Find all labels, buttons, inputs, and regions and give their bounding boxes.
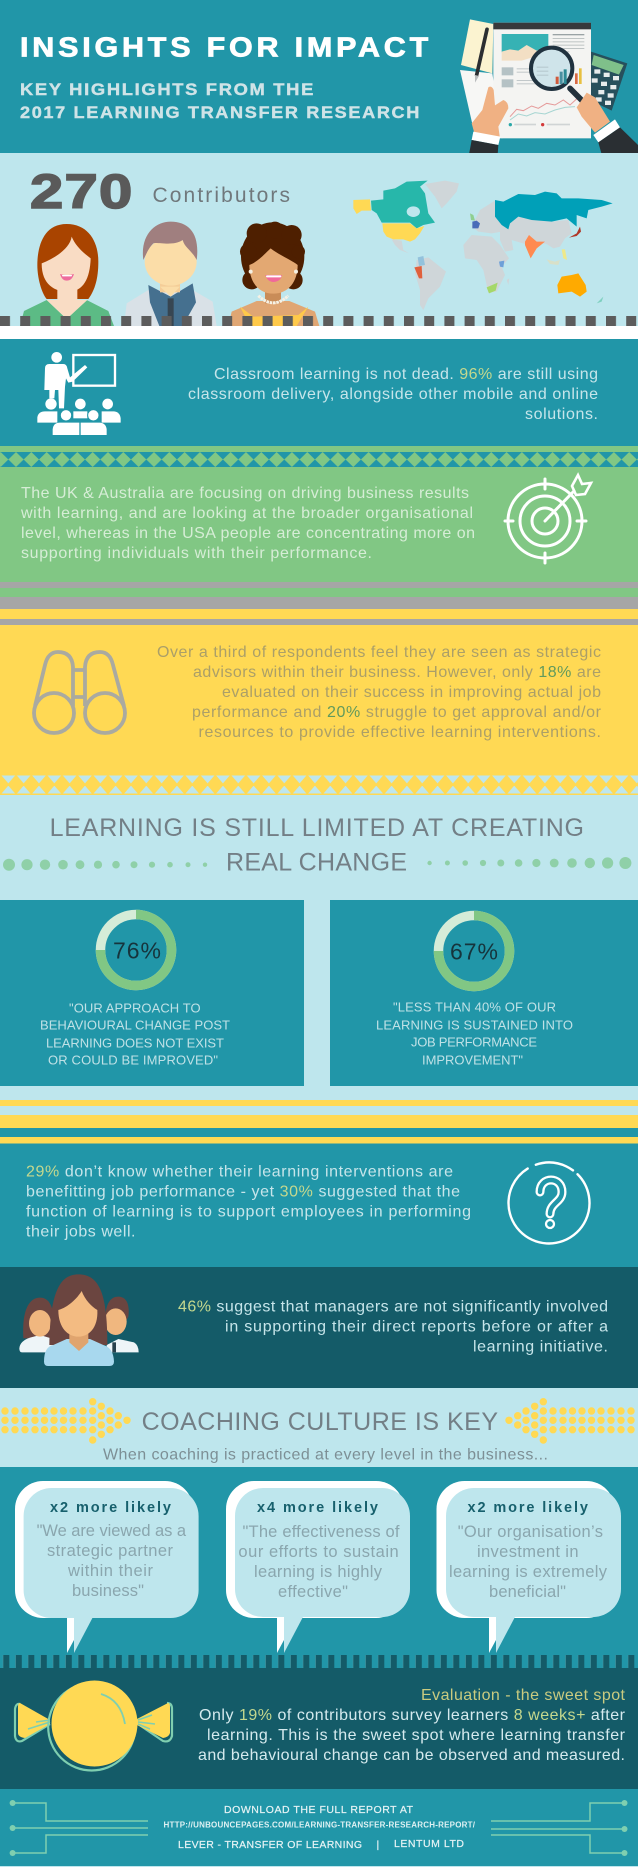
quote: "Our organisation’s xyxy=(458,1523,603,1541)
text: strategic advisors: advisors within their business. However, only 18% are xyxy=(193,664,601,681)
stat: 270: 270 xyxy=(30,166,134,219)
quote: learning is highly xyxy=(254,1563,383,1581)
subtitle: KEY HIGHLIGHTS FROM THE xyxy=(20,81,315,99)
subtitle xyxy=(20,81,421,122)
text: UK and Australia: The UK & Australia are focusing on driving business results xyxy=(21,485,469,502)
bubble: strategic partner xyxy=(15,1481,199,1653)
text: strategic advisors: performance and 20% struggle to get approval and/or xyxy=(192,704,602,721)
panel: classroom xyxy=(0,339,638,446)
panel: learning is limited xyxy=(0,795,638,1100)
label: contributors: Contributors xyxy=(152,184,290,207)
icon: woman with red hair xyxy=(20,224,114,326)
quote: learning is extremely xyxy=(449,1563,608,1581)
quote xyxy=(37,1522,187,1600)
quote: our efforts to sustain xyxy=(238,1543,399,1561)
icon: question mark xyxy=(495,1149,603,1257)
panel: business results xyxy=(0,446,638,582)
icon: man in jacket xyxy=(124,222,217,326)
subtitle: 2017 LEARNING TRANSFER RESEARCH xyxy=(20,104,421,122)
credits xyxy=(178,1838,464,1851)
text: classroom learning: solutions. xyxy=(525,406,598,423)
icon: woman with curly hair xyxy=(228,222,319,326)
bubble: investment xyxy=(436,1481,621,1653)
world map xyxy=(353,181,613,310)
text: managers: in supporting their direct reports before or after a xyxy=(225,1319,608,1336)
icon: target with arrow xyxy=(505,475,591,563)
card: 67% xyxy=(330,900,638,1086)
panel: evaluation sweet spot xyxy=(0,1668,638,1789)
quote xyxy=(449,1523,608,1601)
card: 76% xyxy=(0,900,304,1086)
bubble: sustain learning xyxy=(226,1481,410,1653)
quote: sustained learning: LEARNING IS SUSTAINED INTO xyxy=(376,1017,573,1032)
text: UK and Australia xyxy=(20,485,475,562)
quote: "The effectiveness of xyxy=(242,1523,400,1541)
icon: binoculars xyxy=(34,652,125,733)
text: job performance: benefitting job performance - yet 30% suggested that the xyxy=(26,1184,460,1201)
panel: managers xyxy=(0,1267,638,1388)
text: managers: 46% suggest that managers are not significantly involved xyxy=(178,1299,608,1316)
donut chart: 67% xyxy=(438,916,510,986)
text: job performance: function of learning is to support employees in performing xyxy=(26,1204,471,1220)
dotted ornaments xyxy=(3,857,631,871)
text: strategic advisors: evaluated on their success in improving actual job xyxy=(222,684,601,701)
text: evaluation: learning. This is the sweet spot where learning transfer xyxy=(207,1727,626,1744)
panel: footer xyxy=(0,1789,638,1867)
credits: LENTUM LTD xyxy=(394,1838,464,1850)
quote: sustained learning: "LESS THAN 40% OF OUR xyxy=(393,1000,556,1015)
download heading: DOWNLOAD THE FULL REPORT AT xyxy=(224,1804,414,1816)
donut chart: 76% xyxy=(100,914,172,986)
text: job performance xyxy=(26,1164,471,1240)
text: UK and Australia: supporting individuals with their performance. xyxy=(21,545,372,562)
likelihood: x4 more likely xyxy=(257,1500,378,1516)
value: 76%: 76% xyxy=(113,938,161,964)
text: job performance: their jobs well. xyxy=(26,1224,136,1240)
panel: coaching culture xyxy=(0,1388,638,1467)
quote: business" xyxy=(72,1582,144,1600)
quote: behavioural change: "OUR APPROACH TO xyxy=(69,1000,201,1015)
quote: behavioural change xyxy=(40,1000,230,1068)
quote: sustained learning xyxy=(376,1000,573,1067)
quote: investment in xyxy=(477,1543,578,1561)
heading: REAL CHANGE xyxy=(226,849,407,877)
quote xyxy=(238,1523,400,1601)
text: job performance: 29% don’t know whether their learning interventions are xyxy=(26,1164,453,1181)
text: evaluation: Only 19% of contributors survey learners 8 weeks+ after xyxy=(199,1707,626,1724)
text: strategic advisors xyxy=(157,644,602,741)
subheading: When coaching is practiced at every level in the business... xyxy=(103,1446,548,1463)
quote: within their xyxy=(67,1562,154,1580)
credits: | xyxy=(376,1839,379,1851)
quote: strategic partner xyxy=(47,1542,174,1560)
text: UK and Australia: with learning, and are looking at the broader organisational xyxy=(20,505,473,522)
left dotted arrow xyxy=(1,1398,131,1444)
panel: header xyxy=(0,0,638,154)
icon: report under magnifying glass xyxy=(460,19,638,154)
panel: speech bubbles xyxy=(0,1467,638,1655)
quote: behavioural change: OR COULD BE IMPROVED" xyxy=(48,1053,218,1068)
text: evaluation xyxy=(198,1687,626,1764)
right dotted arrow xyxy=(505,1398,635,1444)
circuit decoration right xyxy=(491,1800,628,1856)
heading: COACHING CULTURE IS KEY xyxy=(142,1408,498,1436)
panel: job performance xyxy=(0,1144,638,1267)
text: classroom learning: Classroom learning is not dead. 96% are still using xyxy=(214,366,598,383)
quote: beneficial" xyxy=(489,1583,566,1601)
text: strategic advisors: Over a third of respondents feel they are seen as strategic xyxy=(157,644,601,661)
text: classroom learning xyxy=(188,366,598,423)
text: evaluation: Evaluation - the sweet spot xyxy=(421,1687,626,1704)
likelihood: x2 more likely xyxy=(468,1500,588,1516)
icon: team of three people xyxy=(19,1274,139,1366)
text: managers xyxy=(178,1299,608,1356)
quote: sustained learning: IMPROVEMENT" xyxy=(422,1052,523,1067)
panel: strategic advisors xyxy=(0,625,638,795)
report url: HTTP://UNBOUNCEPAGES.COM/LEARNING-TRANSFER-RESEARCH-REPORT/ xyxy=(164,1821,476,1830)
quote: effective" xyxy=(278,1583,348,1601)
title: INSIGHTS FOR IMPACT xyxy=(20,32,432,63)
value: 67%: 67% xyxy=(450,939,498,965)
likelihood: x2 more likely xyxy=(50,1500,171,1516)
text: strategic advisors: resources to provide effective learning interventions. xyxy=(198,724,601,741)
heading: LEARNING IS STILL LIMITED AT CREATING xyxy=(50,814,584,842)
circuit decoration left xyxy=(10,1800,148,1856)
icon: wrapped candy xyxy=(15,1680,172,1770)
panel: contributors xyxy=(0,153,638,326)
quote: sustained learning: JOB PERFORMANCE xyxy=(411,1035,537,1050)
text: classroom learning: classroom delivery, alongside other mobile and online xyxy=(188,386,598,403)
icon: teacher and audience xyxy=(37,352,121,435)
text: managers: learning initiative. xyxy=(473,1338,608,1356)
text: evaluation: and behavioural change can be observed and measured. xyxy=(198,1747,625,1764)
quote: behavioural change: BEHAVIOURAL CHANGE POST xyxy=(40,1018,230,1033)
heading xyxy=(50,814,584,877)
text: UK and Australia: level, whereas in the USA people are concentrating more on xyxy=(21,525,475,542)
quote: behavioural change: LEARNING DOES NOT EXIST xyxy=(46,1035,224,1050)
credits: LEVER - TRANSFER OF LEARNING xyxy=(178,1839,362,1851)
quote: "We are viewed as a xyxy=(37,1522,187,1540)
